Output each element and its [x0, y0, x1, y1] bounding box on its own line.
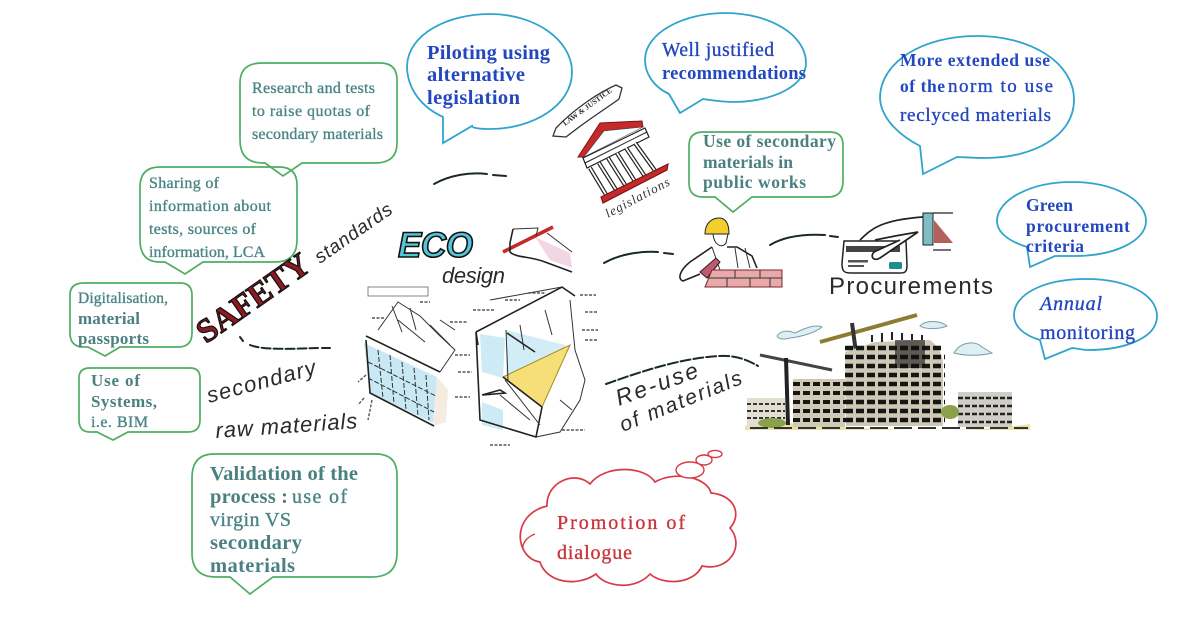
- icon: law and justice banner: [553, 85, 622, 137]
- bubble: more extended use of the norm: norm to use: [948, 76, 1053, 97]
- illustration: construction site with cranes: [745, 315, 1030, 430]
- bubble: sharing of information: [140, 167, 297, 274]
- bubble: use of secondary materials in public works: [689, 131, 843, 212]
- bubble: sharing of information: Sharing of: [149, 175, 220, 192]
- bubble: research and tests: [240, 63, 397, 176]
- hand-lettered label: procurements: Procurements: [829, 273, 993, 300]
- bubble: use of systems, BIM: Systems,: [91, 392, 157, 411]
- bubble: validation of the process: secondary: [210, 532, 303, 554]
- bubble: digitalisation, material passports: material: [78, 309, 140, 328]
- bubble: more extended use of the norm: [880, 36, 1074, 174]
- hand-lettered label: design: design: [442, 263, 505, 288]
- bubble: validation of the process: Validation of the: [210, 463, 358, 485]
- bubble: piloting using alternative legislation: [407, 14, 572, 143]
- bubble: validation of the process: materials: [210, 555, 295, 577]
- bubble: use of secondary materials in public works: materials in: [703, 152, 793, 172]
- bubble: annual monitoring: monitoring: [1040, 322, 1135, 344]
- hand-lettered label: re-use of materials: of materials: [616, 366, 746, 437]
- bubble: well justified recommendations: [645, 13, 806, 113]
- bubble: use of systems, BIM: Use of: [91, 371, 140, 390]
- bubble: use of secondary materials in public works: Use of secondary: [703, 131, 836, 151]
- bubble: sharing of information: information, LCA: [149, 244, 265, 261]
- icon: legislation temple: [578, 121, 672, 221]
- bubble: green procurement criteria: Green: [1026, 195, 1073, 215]
- bubble: green procurement criteria: procurement: [1026, 216, 1130, 236]
- bubble: more extended use of the norm: More extended use: [900, 50, 1050, 70]
- icon: legislation temple: legislations: [602, 174, 672, 221]
- icon: hand with red pen: [503, 227, 572, 272]
- thought cloud: promotion of dialogue: dialogue: [557, 542, 632, 564]
- bubble: piloting using alternative legislation: alternative: [427, 64, 525, 86]
- icon: hand holding payment card: [842, 213, 953, 273]
- icon: law and justice banner: LAW & JUSTICE: [561, 86, 614, 128]
- bubble: more extended use of the norm: reclyced materials: [900, 105, 1051, 126]
- thought cloud: promotion of dialogue: [520, 450, 736, 585]
- bubble: digitalisation, material passports: [70, 283, 192, 356]
- bubble: more extended use of the norm: of the: [900, 76, 945, 96]
- bubble: well justified recommendations: recommendations: [662, 64, 806, 84]
- bubble: annual monitoring: [1014, 279, 1157, 359]
- hand-lettered label: standards: standards: [311, 199, 397, 268]
- bubble: digitalisation, material passports: Digitalisation,: [78, 290, 168, 307]
- bubble: validation of the process: virgin VS: [210, 509, 291, 531]
- bubble: piloting using alternative legislation: legislation: [427, 87, 521, 109]
- dashed connector lines: [240, 173, 838, 384]
- bubble: validation of the process: use of: [292, 486, 347, 508]
- bubble: research and tests: secondary materials: [252, 126, 383, 143]
- bubble: sharing of information: tests, sources of: [149, 221, 257, 238]
- bubble: annual monitoring: Annual: [1038, 293, 1102, 315]
- illustration: left building section: [358, 287, 472, 426]
- hand-lettered label: safety: SAFETY: [190, 246, 317, 351]
- bubble: piloting using alternative legislation: Piloting using: [427, 42, 551, 64]
- bubble: validation of the process: [192, 454, 397, 594]
- bubble: use of secondary materials in public works: public works: [703, 172, 806, 192]
- bubble: research and tests: to raise quotas of: [252, 103, 371, 120]
- bubble: use of systems, BIM: [79, 368, 200, 440]
- bubble: well justified recommendations: Well justified: [662, 40, 774, 61]
- eco logo: ECO: [398, 226, 473, 265]
- bubble: green procurement criteria: [997, 182, 1146, 267]
- bubble: digitalisation, material passports: passports: [78, 329, 149, 348]
- bubble: research and tests: Research and tests: [252, 80, 375, 97]
- bubble: green procurement criteria: criteria: [1026, 236, 1084, 256]
- bubble: validation of the process: process :: [210, 486, 288, 508]
- illustration: worker laying bricks: [680, 218, 782, 287]
- hand-lettered label: secondary: secondary: [204, 354, 320, 408]
- bubble: sharing of information: information about: [149, 198, 272, 215]
- hand-lettered label: raw materials: raw materials: [215, 408, 358, 443]
- thought cloud: promotion of dialogue: Promotion of: [557, 512, 685, 534]
- hand-lettered label: re-use of materials: Re-use: [612, 357, 702, 411]
- bubble: use of systems, BIM: i.e. BIM: [91, 414, 148, 431]
- illustration: right building section: [473, 287, 598, 445]
